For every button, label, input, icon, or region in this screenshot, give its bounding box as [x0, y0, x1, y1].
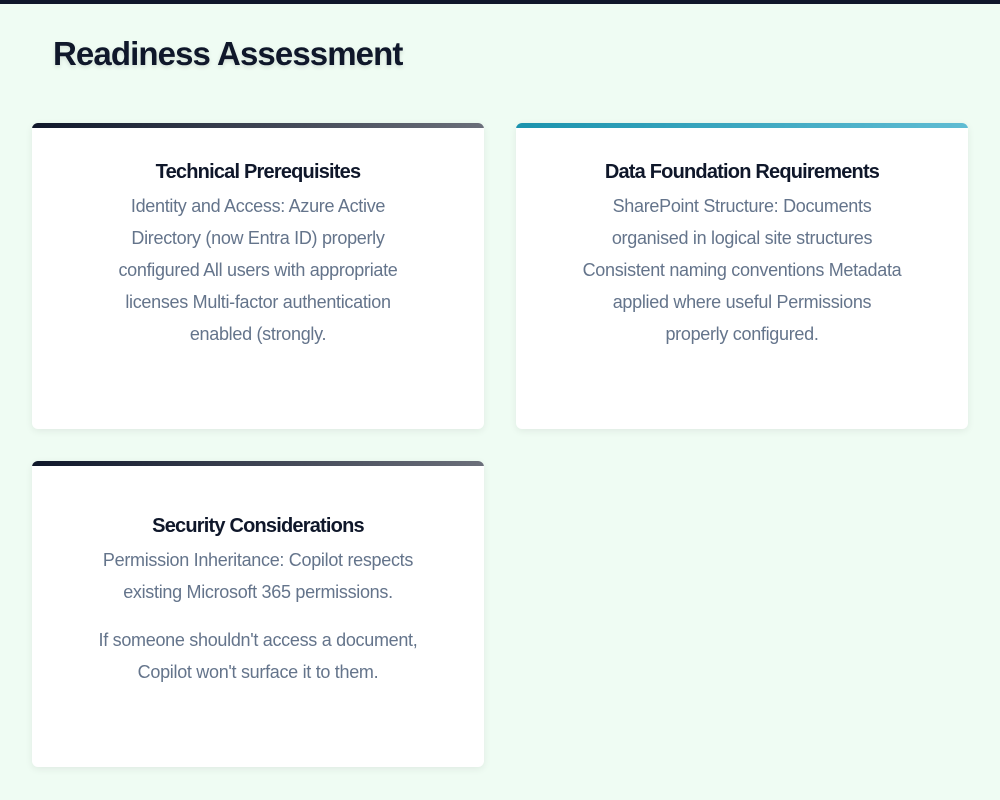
panel: technical prerequisites [32, 123, 484, 429]
text: data foundation body [583, 196, 902, 344]
text: technical prerequisites body: enabled (strongly. [190, 324, 326, 344]
text: data foundation body: Consistent naming conventions Metadata [583, 260, 901, 280]
heading: technical prerequisites: Technical Prerequisites [156, 161, 360, 183]
text: security body [99, 550, 417, 682]
text: technical prerequisites body: licenses Multi-factor authentication [125, 292, 391, 312]
text: technical prerequisites body: Identity and Access: Azure Active [131, 196, 385, 216]
text: technical prerequisites body [118, 196, 398, 344]
text: technical prerequisites body: Directory (now Entra ID) properly [131, 228, 385, 248]
text: technical prerequisites body: configured All users with appropriate [118, 260, 398, 280]
text: security body: existing Microsoft 365 permissions. [123, 582, 393, 602]
text: data foundation body: organised in logical site structures [612, 228, 872, 248]
panel: security considerations [32, 461, 484, 767]
text: security body: Copilot won't surface it to them. [138, 662, 378, 682]
text: security body: If someone shouldn't access a document, [99, 630, 417, 650]
text: data foundation body: applied where useful Permissions [613, 292, 871, 312]
text: data foundation body: SharePoint Structure: Documents [613, 196, 871, 216]
text: security body: Permission Inheritance: Copilot respects [103, 550, 413, 570]
heading: data foundation: Data Foundation Requirements [605, 161, 879, 183]
text: data foundation body: properly configured. [665, 324, 819, 344]
panel: data foundation requirements [516, 123, 968, 429]
title: Readiness Assessment [53, 35, 402, 72]
heading: security considerations: Security Considerations [152, 515, 364, 537]
